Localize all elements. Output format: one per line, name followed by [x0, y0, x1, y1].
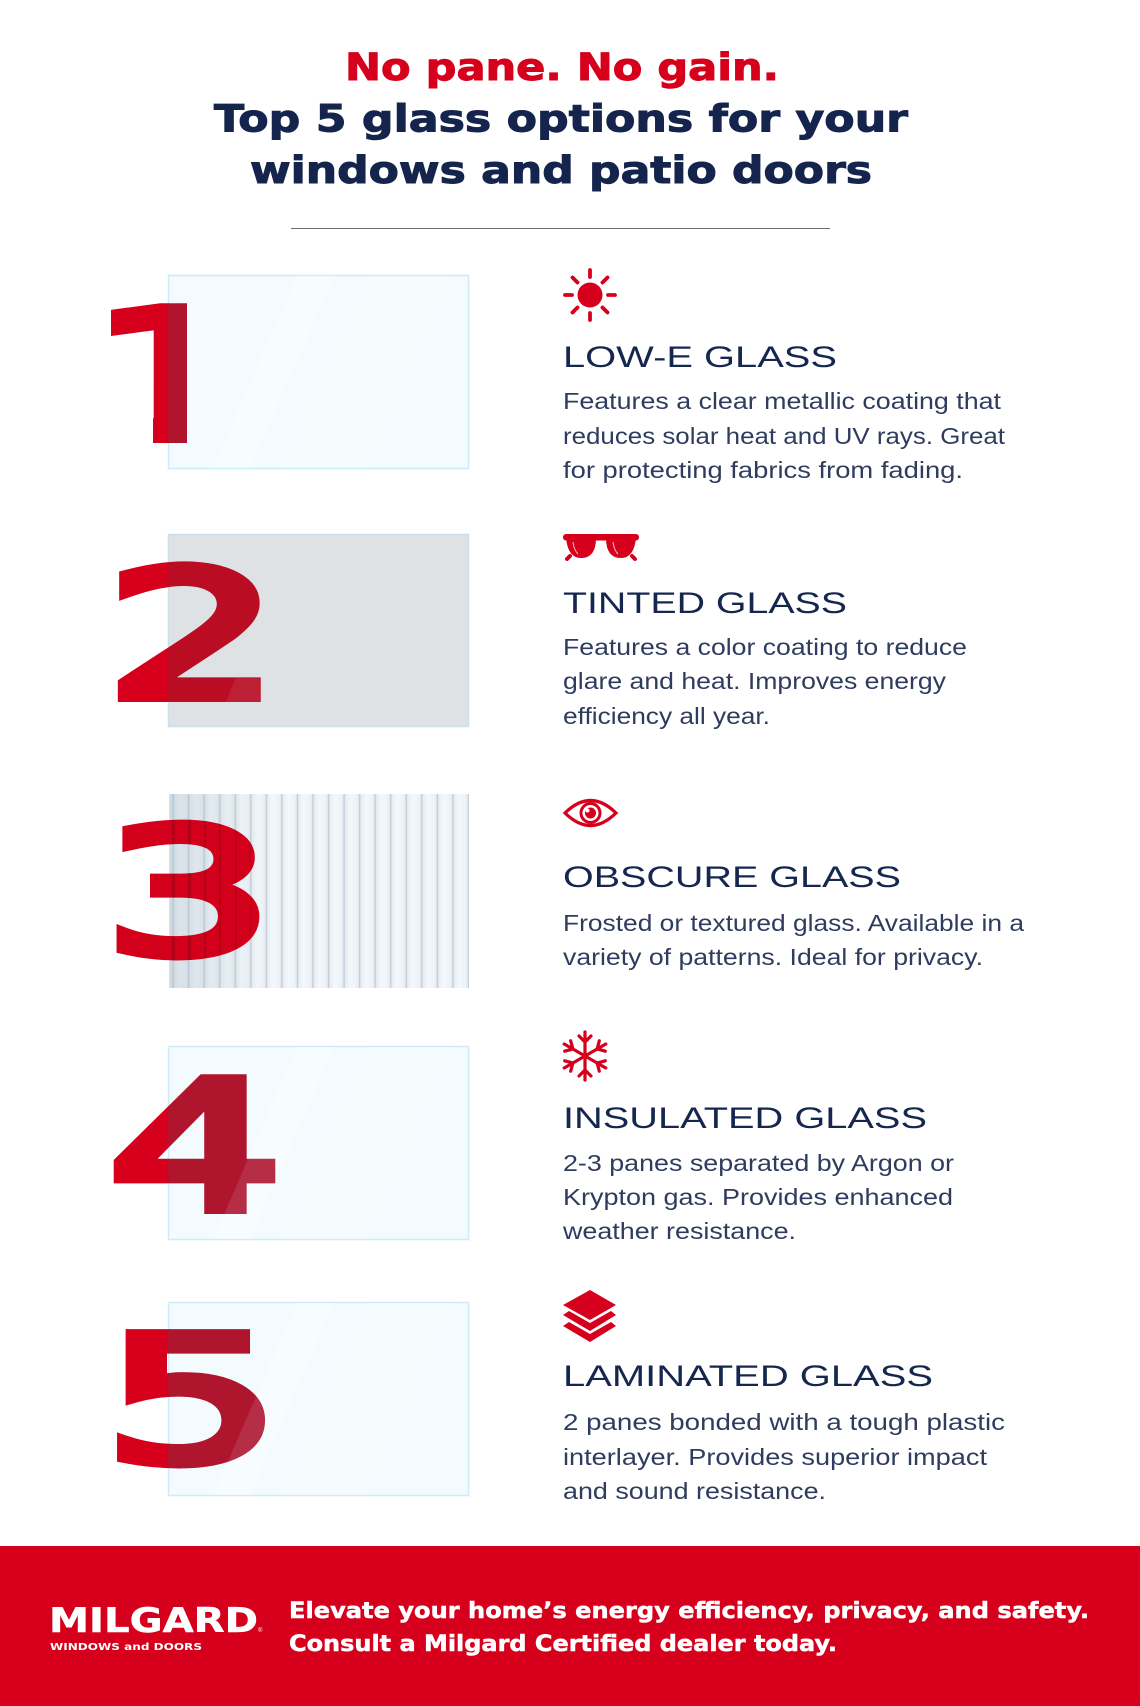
footer call to action: [289, 1599, 1089, 1657]
text: low-e description: reduces solar heat and UV rays. Great: [563, 423, 1006, 449]
icon: snowflake: [561, 1032, 609, 1080]
text: tinted description: [563, 634, 967, 729]
panel 1: low-e glass pane and number: [111, 274, 470, 470]
heading: tinted glass: TINTED GLASS: [563, 587, 847, 620]
footer band: [0, 1546, 1140, 1706]
heading: insulated glass: INSULATED GLASS: [563, 1102, 927, 1135]
text: obscure description: Frosted or textured glass. Available in a: [563, 910, 1024, 936]
panel 4: insulated glass pane and number: [108, 1044, 468, 1251]
text: low-e description: Features a clear metallic coating that: [563, 388, 1002, 414]
title: [214, 46, 909, 192]
text: obscure description: [563, 910, 1024, 970]
title: windows and patio doors: [250, 149, 872, 192]
footer call to action: Consult a Milgard Certified dealer today.: [289, 1632, 837, 1657]
panel 1: low-e glass pane and number: 1: [85, 273, 255, 480]
text: insulated description: Krypton gas. Provides enhanced: [563, 1184, 953, 1210]
icon: eye: [565, 800, 616, 826]
panel 5: laminated glass pane and number: [104, 1300, 468, 1503]
panel 5: laminated glass pane and number: 5: [104, 1300, 282, 1503]
panel 3: obscure glass pane and number: [104, 792, 469, 994]
text: insulated description: [562, 1150, 954, 1244]
text: tinted description: Features a color coating to reduce: [563, 634, 967, 660]
heading: obscure glass: OBSCURE GLASS: [563, 861, 901, 894]
title: Top 5 glass options for your: [214, 98, 909, 140]
panel 3: obscure glass pane and number: 3: [104, 792, 273, 994]
text: insulated description: weather resistance.: [562, 1218, 796, 1244]
heading: low-e glass: LOW-E GLASS: [563, 341, 837, 374]
text: laminated description: [563, 1409, 1005, 1504]
text: laminated description: and sound resistance.: [563, 1478, 826, 1504]
text: tinted description: efficiency all year.: [563, 703, 770, 729]
panel 2: tinted glass pane and number: [106, 534, 468, 739]
text: low-e description: for protecting fabrics from fading.: [563, 457, 963, 483]
panel 2: tinted glass pane and number: 2: [106, 534, 280, 739]
text: low-e description: [563, 388, 1006, 483]
text: insulated description: 2-3 panes separated by Argon or: [563, 1150, 954, 1176]
logo: Milgard: WINDOWS and DOORS: [50, 1642, 202, 1653]
icon: sun: [565, 270, 615, 320]
icon: layers: [563, 1290, 616, 1342]
text: laminated description: 2 panes bonded with a tough plastic: [563, 1409, 1005, 1435]
logo: Milgard: ®: [258, 1627, 263, 1634]
text: obscure description: variety of patterns. Ideal for privacy.: [563, 944, 983, 970]
heading: laminated glass: LAMINATED GLASS: [563, 1360, 933, 1393]
text: laminated description: interlayer. Provides superior impact: [563, 1444, 988, 1470]
text: tinted description: glare and heat. Improves energy: [563, 668, 947, 694]
icon: sunglasses: [563, 534, 639, 559]
logo: Milgard: MILGARD: [49, 1601, 258, 1641]
footer call to action: Elevate your home’s energy efficiency, privacy, and safety.: [289, 1599, 1089, 1624]
logo: Milgard: [49, 1601, 263, 1653]
panel 4: insulated glass pane and number: 4: [108, 1044, 283, 1251]
title: No pane. No gain.: [345, 46, 779, 89]
